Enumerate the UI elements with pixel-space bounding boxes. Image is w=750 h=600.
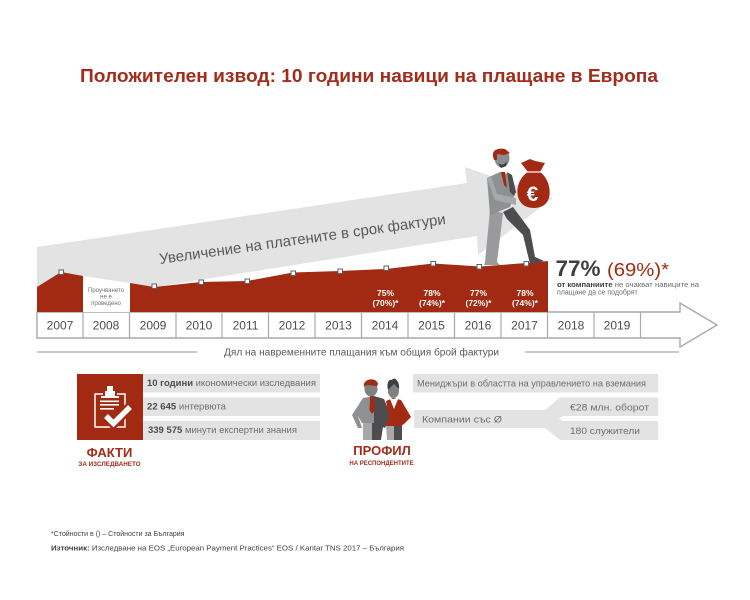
timeline arrow with years: 2013 — [325, 318, 352, 332]
profile bars: 180 служители — [570, 426, 640, 437]
chart values: 78% — [423, 288, 441, 298]
grey growth arrow: Увеличение на платените в срок фактури — [158, 211, 447, 268]
footnotes: *Стойности в () – Стойности за България — [51, 530, 185, 538]
timeline arrow with years — [37, 303, 717, 347]
timeline arrow with years: 2016 — [465, 318, 492, 332]
timeline arrow with years: 2011 — [233, 318, 259, 332]
timeline arrow with years: 2014 — [372, 318, 399, 332]
chart values: (70%)* — [373, 298, 399, 308]
icon: businessman carrying money bag — [484, 148, 550, 265]
chart values: 75% — [377, 288, 394, 298]
title: Положителен извод: 10 години навици на плащане в Европа — [80, 66, 659, 86]
facts heading: ЗА ИЗСЛЕДВАНЕТО — [78, 461, 141, 468]
timeline arrow with years: 2019 — [604, 318, 631, 332]
footnotes — [51, 530, 404, 552]
panel: facts — [77, 374, 320, 468]
key figure 77%: плащане да се подобрят — [557, 288, 639, 296]
chart values: (74%)* — [419, 298, 446, 308]
key figure 77%: от компаниите не очакват навиците на — [557, 282, 699, 289]
profile heading: ПРОФИЛ — [353, 443, 411, 458]
timeline arrow with years: 2017 — [511, 318, 538, 332]
data point markers — [59, 262, 528, 288]
icon: euro money bag: € — [527, 183, 539, 206]
timeline arrow with years: 2008 — [93, 318, 120, 332]
grey growth arrow — [37, 167, 553, 312]
key figure 77%: 77% — [556, 256, 601, 281]
chart values: (72%)* — [466, 298, 492, 308]
chart values: (74%)* — [512, 298, 539, 308]
key figure 77% — [556, 256, 699, 296]
fact bars: 339 575 минути експертни знания — [148, 425, 297, 435]
icon: two managers — [352, 379, 411, 440]
profile bars: Компании със Ø — [422, 414, 503, 426]
not surveyed 2008: проведено — [91, 301, 122, 307]
fact bars: 22 645 интервюта — [147, 402, 226, 412]
facts heading — [78, 445, 141, 468]
not surveyed 2008: Проучването — [88, 288, 125, 294]
fact bars: 10 години икономически изследвания — [147, 378, 316, 388]
not surveyed 2008 — [83, 276, 130, 312]
timeline arrow with years: 2018 — [558, 318, 585, 332]
chart values — [373, 288, 539, 308]
timeline arrow with years: 2007 — [47, 318, 74, 332]
timeline arrow with years: 2012 — [279, 318, 306, 332]
facts heading: ФАКТИ — [87, 445, 132, 460]
profile bars: Мениджъри в областта на управлението на вземания — [417, 378, 646, 390]
profile bars: €28 млн. оборот — [570, 402, 650, 414]
panel: respondent profile — [349, 374, 658, 467]
fact bars — [143, 374, 320, 440]
profile bars — [413, 374, 658, 440]
icon: clipboard with check — [77, 374, 143, 440]
timeline arrow with years: 2009 — [140, 318, 167, 332]
timeline arrow with years: 2010 — [186, 318, 213, 332]
timeline caption: Дял на навременните плащания към общия брой фактури — [224, 346, 499, 358]
chart values: 78% — [516, 288, 534, 298]
chart values: 77% — [470, 288, 487, 298]
profile heading: НА РЕСПОНДЕНТИТЕ — [349, 461, 414, 467]
not surveyed 2008: не е — [100, 294, 112, 300]
red area chart — [37, 261, 548, 312]
timeline arrow with years: 2015 — [418, 318, 445, 332]
footnotes: Източник: Изследване на EOS „European Payment Practices“ EOS / Kantar TNS 2017 – България — [51, 546, 404, 552]
profile heading — [349, 443, 414, 467]
key figure 77%: (69%)* — [607, 259, 669, 280]
